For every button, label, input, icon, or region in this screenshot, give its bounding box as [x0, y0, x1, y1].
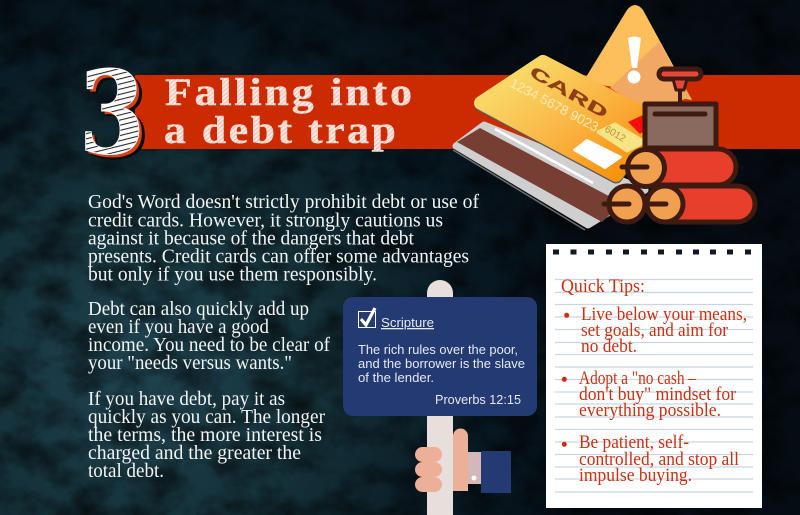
tip 1: set goals, and aim for	[581, 321, 728, 341]
numeral 3: 3	[79, 46, 145, 180]
notepad holes	[553, 250, 751, 254]
tip 2: everything possible.	[579, 401, 721, 421]
tip 1: no debt.	[581, 337, 637, 357]
scripture verse: and the borrower is the slave	[358, 356, 525, 371]
tip 3: Be patient, self-	[579, 433, 689, 453]
scripture heading: Scripture	[381, 315, 434, 330]
body text	[88, 192, 479, 482]
lower right stick	[640, 186, 755, 222]
ruled lines	[555, 280, 753, 492]
white label	[574, 140, 621, 168]
scripture verse: The rich rules over the poor,	[358, 342, 518, 357]
card title: CARD	[525, 64, 611, 124]
tip 3: impulse buying.	[579, 466, 692, 486]
icon: dynamite	[604, 69, 755, 222]
paragraph 3	[88, 389, 325, 482]
paragraph 1: presents. Credit cards can offer some advantages	[88, 246, 469, 268]
tip 2: don't buy" mindset for	[579, 385, 736, 405]
verse reference: Proverbs 12:15	[435, 392, 521, 407]
icon: credit cards	[453, 62, 655, 230]
pole	[427, 280, 453, 515]
icon: hand	[415, 428, 511, 493]
paragraph 3: If you have debt, pay it as	[88, 389, 285, 410]
sign panel	[343, 297, 537, 416]
back card	[453, 125, 645, 230]
numeral 3: 3	[82, 49, 148, 183]
icon: warning triangle	[583, 5, 692, 112]
paragraph 1: but only if you use them responsibly.	[88, 264, 377, 286]
tip 2: Adopt a "no cash –	[579, 369, 697, 389]
top stick	[622, 149, 736, 186]
paragraph 3: quickly as you can. The longer	[88, 407, 325, 428]
icon: checkbox	[358, 308, 376, 328]
paragraph 2: Debt can also quickly add up	[88, 299, 309, 320]
paragraph 1: God's Word doesn't strictly prohibit debt or use of	[88, 192, 479, 213]
tip 1	[564, 305, 747, 357]
paragraph 3: total debt.	[88, 461, 164, 482]
scripture verse	[358, 342, 525, 385]
panel: quick tips note	[546, 244, 762, 508]
security code box: 6012	[602, 124, 628, 145]
title: a debt trap	[164, 108, 396, 151]
tip 3	[562, 433, 739, 486]
red title band	[135, 75, 800, 149]
quick tips heading: Quick Tips:	[561, 277, 645, 297]
plunger handle	[659, 69, 701, 103]
tip 1: Live below your means,	[581, 305, 747, 325]
detonator box	[645, 104, 716, 148]
front card	[481, 62, 655, 176]
card number: 1234 5678 9023	[508, 75, 601, 135]
paragraph 3: the terms, the more interest is	[88, 425, 322, 446]
security code box	[598, 124, 645, 151]
paragraph 1	[88, 192, 479, 286]
paragraph 2: your "needs versus wants."	[88, 353, 292, 374]
paragraph 2: income. You need to be clear of	[88, 335, 330, 356]
paragraph 1: against it because of the dangers that debt	[88, 228, 415, 250]
tip 3: controlled, and stop all	[579, 450, 739, 470]
scripture verse: of the lender.	[358, 370, 434, 385]
lower left stick	[604, 186, 645, 222]
title	[164, 70, 412, 151]
paragraph 1: credit cards. However, it strongly cautions us	[88, 210, 443, 232]
paragraph 3: charged and the greater the	[88, 443, 301, 464]
card chip	[628, 115, 652, 134]
tip 2	[562, 369, 736, 421]
paragraph 2	[88, 299, 330, 374]
numeral 3: 3	[84, 51, 151, 185]
paragraph 2: even if you have a good	[88, 317, 269, 338]
signpost	[343, 280, 537, 515]
title: Falling into	[165, 70, 412, 113]
